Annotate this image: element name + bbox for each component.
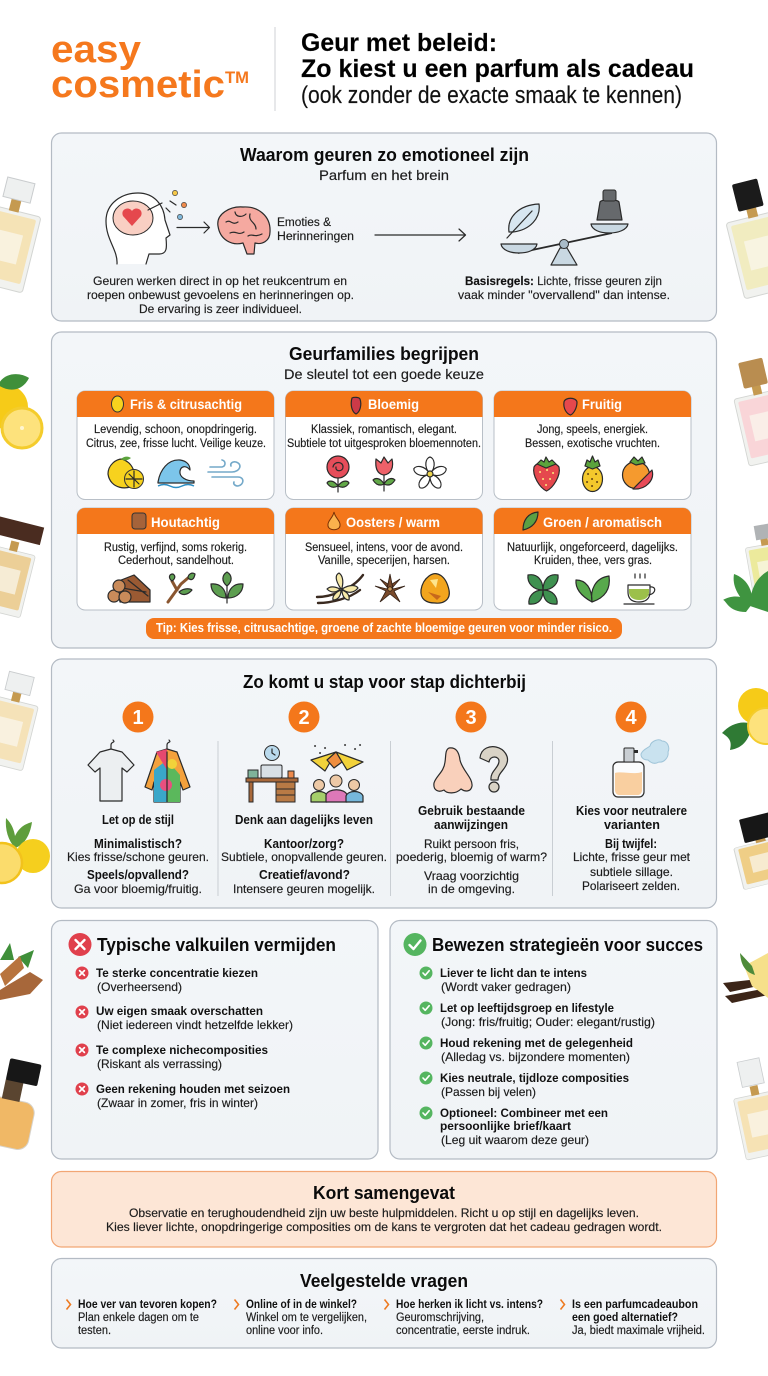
text: denk aan dagelijks leven: Intensere geuren mogelijk. — [233, 882, 375, 896]
item 2: Let op leeftijdsgroep en lifestyle — [440, 1001, 614, 1015]
logo: easy cosmetic: easy — [51, 29, 141, 71]
faq 2: Winkel om te vergelijken, — [246, 1312, 367, 1324]
card: houtachtig: Rustig, verfijnd, soms rokerig. — [104, 542, 247, 554]
item 1: Te sterke concentratie kiezen — [96, 966, 258, 980]
text: uitleg reukcentrum: roepen onbewust gevoelens en herinneringen op. — [87, 288, 354, 302]
number badge 2 — [288, 702, 320, 732]
faq 1: Hoe ver van tevoren kopen? — [78, 1299, 217, 1311]
title block: (ook zonder de exacte smaak te kennen) — [301, 82, 682, 109]
text: neutralere varianten: Bij twijfel: — [605, 837, 657, 851]
card: houtachtig: Cederhout, sandelhout. — [118, 555, 234, 567]
card: oosters warm: Vanille, specerijen, harsen. — [318, 555, 450, 567]
icon: spray bottle with mist — [613, 740, 669, 797]
faq 2: online voor info. — [246, 1325, 323, 1337]
item 4 — [76, 1082, 290, 1110]
icon: nose and question mark — [434, 747, 508, 793]
text: denk aan dagelijks leven: Creatief/avond? — [259, 868, 350, 882]
card: groen aromatisch: Groen / aromatisch — [543, 514, 662, 530]
icon: red cross — [68, 933, 92, 956]
faq 4: een goed alternatief? — [572, 1312, 678, 1324]
card: fris en citrusachtig: Fris & citrusachtig — [130, 396, 242, 412]
text: basisregels: vaak minder "overvallend" dan intense. — [458, 288, 670, 302]
heading: Geurfamilies begrijpen — [289, 344, 479, 364]
item 4: (Zwaar in zomer, fris in winter) — [97, 1096, 258, 1110]
item 3: Houd rekening met de gelegenheid — [440, 1036, 633, 1050]
subheading: De sleutel tot een goede keuze — [284, 366, 484, 382]
faq 3: concentratie, eerste indruk. — [396, 1325, 530, 1337]
text: let op de stijl: Let op de stijl — [102, 813, 174, 827]
icon: head with heart — [106, 190, 187, 264]
card: groen aromatisch — [494, 508, 691, 610]
card: oosters warm: Oosters / warm — [346, 514, 440, 530]
number badge 3 — [456, 702, 486, 732]
text: bestaande aanwijzingen: aanwijzingen — [434, 818, 508, 832]
number badge 2: 2 — [298, 707, 310, 729]
text: let op de stijl: Speels/opvallend? — [87, 868, 189, 882]
heading: Waarom geuren zo emotioneel zijn — [240, 145, 529, 165]
icon: scale with feather and weight — [501, 190, 628, 265]
callout: tip — [146, 618, 622, 639]
item 1 — [420, 966, 587, 994]
text: uitleg reukcentrum: Geuren werken direct in op het reukcentrum en — [93, 274, 347, 288]
item 5: persoonlijke brief/kaart — [440, 1119, 571, 1133]
panel: bewezen strategieen — [390, 920, 717, 1159]
text: neutralere varianten: Polariseert zelden. — [582, 879, 680, 893]
card: fruitig: Fruitig — [582, 396, 622, 412]
subheading: Parfum en het brein — [319, 167, 449, 183]
text: denk aan dagelijks leven: Kantoor/zorg? — [264, 837, 344, 851]
card: oosters warm — [286, 508, 482, 610]
card: fruitig: Jong, speels, energiek. — [537, 424, 648, 436]
card: fris en citrusachtig: Levendig, schoon, onopdringerig. — [94, 424, 257, 436]
faq 1: Plan enkele dagen om te — [78, 1312, 199, 1324]
heading: Typische valkuilen vermijden — [97, 935, 336, 955]
item 1: Liever te licht dan te intens — [440, 966, 587, 980]
text: let op de stijl: Ga voor bloemig/fruitig. — [74, 882, 202, 896]
faq 4: Ja, biedt maximale vrijheid. — [572, 1325, 705, 1337]
text: neutralere varianten: Kies voor neutralere — [576, 804, 687, 818]
icon: brain — [218, 207, 270, 254]
card: bloemig: Bloemig — [368, 396, 419, 412]
item 4 — [420, 1071, 629, 1099]
logo: easy cosmetic: TM — [225, 68, 249, 87]
card: fris en citrusachtig: Citrus, zee, frisse lucht. Veilige keuze. — [86, 438, 266, 450]
card: bloemig: Klassiek, romantisch, elegant. — [311, 424, 457, 436]
title block — [301, 29, 694, 109]
item 5: Optioneel: Combineer met een — [440, 1106, 608, 1120]
step 3 — [396, 702, 547, 896]
panel: kort samengevat — [52, 1172, 716, 1247]
callout: tip: Tip: Kies frisse, citrusachtige, groene of zachte bloemige geuren voor minder risico. — [156, 620, 612, 635]
item 1: (Overheersend) — [97, 980, 182, 994]
step 2 — [221, 702, 387, 896]
heading: Bewezen strategieën voor succes — [432, 935, 703, 955]
item 2: (Niet iedereen vindt hetzelfde lekker) — [97, 1018, 293, 1032]
summary text: Kies liever lichte, onopdringerige composities om de kans te vergroten dat het cadeau gedragen wordt. — [106, 1220, 662, 1234]
number badge 1 — [122, 702, 154, 732]
item 1 — [76, 966, 258, 994]
item 4: (Passen bij velen) — [441, 1085, 536, 1099]
text: uitleg reukcentrum — [87, 274, 354, 316]
text: bestaande aanwijzingen: Ruikt persoon fris, — [424, 837, 519, 851]
item 3 — [76, 1043, 268, 1071]
card: groen aromatisch: Kruiden, thee, vers gras. — [534, 555, 652, 567]
arrow — [375, 229, 466, 241]
card: houtachtig — [77, 508, 274, 610]
number badge 4: 4 — [625, 707, 637, 729]
item 1: (Wordt vaker gedragen) — [441, 980, 571, 994]
text: neutralere varianten: subtiele sillage. — [590, 865, 673, 879]
faq 3: Geuromschrijving, — [396, 1312, 484, 1324]
panel: geurfamilies — [52, 332, 716, 648]
text: basisregels: Basisregels: Lichte, frisse geuren zijn — [465, 274, 662, 288]
arrow — [177, 222, 210, 233]
heading: Veelgestelde vragen — [300, 1271, 468, 1291]
item 2 — [420, 1001, 655, 1029]
side decoration: perfume bottles and ingredients — [0, 174, 768, 1160]
card: groen aromatisch: Natuurlijk, ongeforceerd, dagelijks. — [507, 542, 678, 554]
faq 1: testen. — [78, 1325, 111, 1337]
card: fruitig — [494, 391, 691, 500]
panel: waarom geuren emotioneel zijn — [52, 133, 716, 321]
logo: easy cosmetic — [51, 29, 249, 106]
item 2 — [76, 1004, 293, 1032]
item 2: (Jong: fris/fruitig; Ouder: elegant/rustig) — [441, 1015, 655, 1029]
icon: t-shirt and colourful jacket — [88, 740, 190, 802]
text: neutralere varianten: varianten — [604, 818, 660, 832]
heading: Kort samengevat — [313, 1183, 455, 1203]
text: neutralere varianten: Lichte, frisse geur met — [573, 850, 691, 864]
icon: green check — [404, 933, 426, 956]
text: bestaande aanwijzingen: in de omgeving. — [428, 882, 515, 896]
icon: desk and party — [246, 745, 363, 802]
faq 3 — [384, 1299, 543, 1337]
item 3 — [420, 1036, 633, 1064]
text: denk aan dagelijks leven: Subtiele, onopvallende geuren. — [221, 850, 387, 864]
panel: veelgestelde vragen — [52, 1258, 716, 1348]
card: oosters warm: Sensueel, intens, voor de avond. — [305, 542, 463, 554]
title block: Zo kiest u een parfum als cadeau — [301, 55, 694, 83]
text: bestaande aanwijzingen: Gebruik bestaande — [418, 804, 525, 818]
summary text — [106, 1206, 662, 1234]
item 4: Kies neutrale, tijdloze composities — [440, 1071, 629, 1085]
number badge 3: 3 — [465, 707, 477, 729]
card: houtachtig: Houtachtig — [151, 514, 220, 530]
text: let op de stijl: Kies frisse/schone geuren. — [67, 850, 209, 864]
item 3: (Alledag vs. bijzondere momenten) — [441, 1050, 630, 1064]
summary text: Observatie en terughoudendheid zijn uw beste hulpmiddelen. Richt u op stijl en dagelijks leven. — [129, 1206, 639, 1220]
text: neutralere varianten — [573, 804, 691, 893]
item 4: Geen rekening houden met seizoen — [96, 1082, 290, 1096]
card: fris en citrusachtig — [77, 391, 274, 500]
step 1 — [67, 702, 209, 896]
item 2: Uw eigen smaak overschatten — [96, 1004, 263, 1018]
text: let op de stijl: Minimalistisch? — [94, 837, 182, 851]
text: let op de stijl — [67, 813, 209, 896]
label: emoties en herinneringen: Herinneringen — [277, 231, 354, 243]
item 3: Te complexe nichecomposities — [96, 1043, 268, 1057]
heading: Zo komt u stap voor stap dichterbij — [243, 672, 526, 692]
number badge 1: 1 — [132, 707, 144, 729]
item 5: (Leg uit waarom deze geur) — [441, 1133, 589, 1147]
title block: Geur met beleid: — [301, 29, 497, 57]
panel: stappen — [52, 659, 716, 908]
faq 2 — [234, 1299, 367, 1337]
text: basisregels — [458, 274, 670, 302]
text: denk aan dagelijks leven — [221, 813, 387, 896]
item 5 — [420, 1106, 608, 1147]
label: emoties en herinneringen — [277, 217, 354, 243]
card: bloemig — [286, 391, 482, 500]
logo: easy cosmetic: cosmetic — [51, 64, 225, 106]
text: uitleg reukcentrum: De ervaring is zeer individueel. — [139, 302, 302, 316]
faq 1 — [66, 1299, 217, 1337]
number badge 4 — [616, 702, 646, 732]
step 4 — [573, 702, 691, 893]
item 3: (Riskant als verrassing) — [97, 1057, 222, 1071]
faq 2: Online of in de winkel? — [246, 1299, 357, 1311]
faq 4 — [560, 1299, 705, 1337]
faq 3: Hoe herken ik licht vs. intens? — [396, 1299, 543, 1311]
faq 4: Is een parfumcadeaubon — [572, 1299, 698, 1311]
panel: typische valkuilen — [52, 920, 378, 1159]
text: bestaande aanwijzingen: Vraag voorzichtig — [424, 869, 519, 883]
text: bestaande aanwijzingen — [396, 804, 547, 896]
text: bestaande aanwijzingen: poederig, bloemig of warm? — [396, 850, 547, 864]
label: emoties en herinneringen: Emoties & — [277, 217, 331, 229]
card: fruitig: Bessen, exotische vruchten. — [525, 438, 660, 450]
text: denk aan dagelijks leven: Denk aan dagelijks leven — [235, 813, 373, 827]
card: bloemig: Subtiele tot uitgesproken bloemennoten. — [287, 438, 481, 450]
